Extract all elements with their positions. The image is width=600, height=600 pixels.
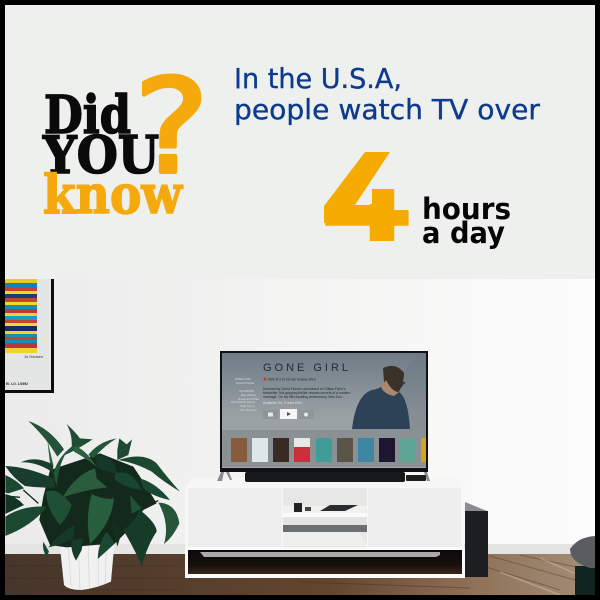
speaker — [465, 502, 488, 577]
actor silhouette — [352, 366, 410, 429]
framed poster: Jo Hansen — [24, 354, 43, 359]
tv stand — [185, 478, 465, 578]
logo word: know: know — [43, 164, 183, 226]
sidebar credits: DIRECTOR — [235, 377, 251, 381]
armchair — [570, 536, 595, 595]
sound bar — [245, 472, 405, 482]
movie title: GONE GIRL: GONE GIRL — [263, 362, 348, 374]
logo question mark: ? — [134, 52, 209, 204]
sidebar credits: STARRING — [239, 389, 255, 393]
plant — [5, 421, 180, 590]
headline line 1: In the U.S.A, — [234, 62, 402, 95]
playback buttons — [263, 409, 314, 419]
movie description: 96% R 2 hr 29 min Drama 2014 — [268, 378, 316, 382]
movie description: Directed by David Fincher and based on Gillian Flynn's — [263, 387, 346, 391]
sidebar credits: Kim Dickens — [240, 408, 257, 412]
headline: In the U.S.A, people watch TV over — [234, 62, 540, 126]
tv stand right door — [368, 488, 461, 547]
movie row — [222, 430, 426, 467]
movie description: Available On: iTunes HBO — [263, 401, 303, 405]
tv stand center shelf — [283, 488, 367, 547]
sidebar credits: Tyler Perry — [240, 404, 255, 408]
tv stand feet — [217, 472, 430, 481]
tv stand base frame — [185, 548, 465, 578]
text: hours a day — [422, 192, 511, 250]
headline line 2: people watch TV over — [234, 93, 540, 126]
sidebar credits: David Fincher — [236, 381, 255, 385]
logo word: YOU: YOU — [42, 126, 159, 186]
sidebar credits: Rosamund Pike — [238, 397, 260, 401]
sidebar credits: Neil Patrick Harris — [231, 400, 256, 404]
foliage — [5, 421, 180, 566]
movie description: bestseller, this gripping thriller reveals secrets of a modern — [263, 391, 351, 395]
movie description — [263, 378, 351, 405]
framed poster: El. LO. 1/1992 — [6, 382, 28, 386]
tv stand left door — [188, 488, 282, 547]
baseboard — [5, 544, 595, 554]
sidebar credits: Ben Affleck — [241, 393, 256, 397]
photo: living room — [5, 279, 595, 595]
floor — [5, 554, 595, 595]
framed poster — [5, 279, 54, 393]
sidebar credits — [231, 377, 260, 412]
movie description: marriage. On his fifth wedding anniversary, Nick Dun... — [263, 395, 345, 399]
text line: hours: hours — [422, 192, 511, 226]
logo word: Did: Did — [44, 85, 131, 146]
tv bezel — [220, 351, 428, 472]
logo: Did YOU know? — [42, 52, 209, 226]
wall — [5, 279, 595, 549]
big number 4: 4 — [319, 134, 415, 268]
panel: headline background — [5, 5, 595, 279]
pot — [60, 537, 115, 590]
television — [217, 351, 430, 482]
set-top box — [406, 475, 426, 481]
text line: a day: a day — [422, 216, 505, 250]
tv screen — [222, 353, 426, 468]
